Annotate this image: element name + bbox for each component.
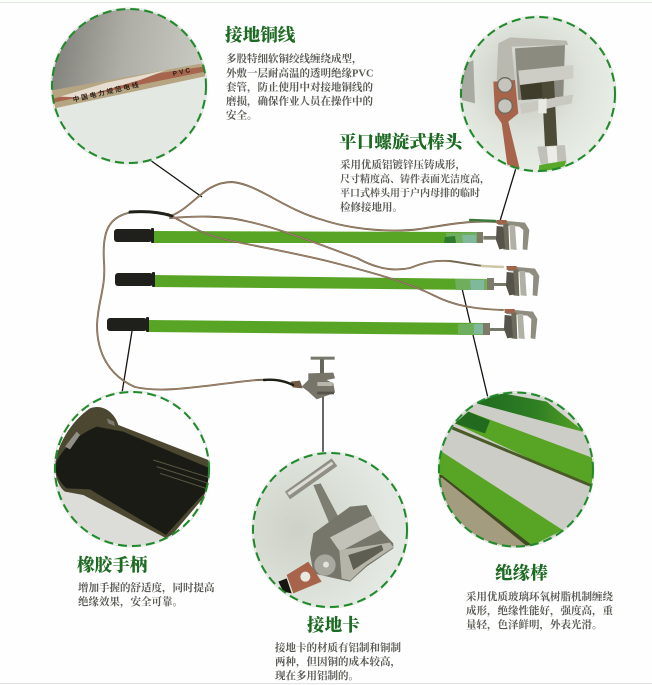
text block: flat screw clamp: 平口式棒头用于户内母排的临时 bbox=[340, 186, 480, 200]
text block: flat screw clamp: 检修接地用。 bbox=[340, 200, 403, 214]
leader lines bbox=[122, 160, 516, 452]
text block: flat screw clamp: 采用优质铝镀锌压铸成形， bbox=[340, 158, 466, 171]
rod 1 bbox=[114, 228, 483, 243]
panel: copper wire photo circle: PVC bbox=[172, 67, 193, 78]
heading: copper wire: 接地铜线 bbox=[225, 25, 296, 45]
text block: insulating rod: 成形，绝缘性能好，强度高，重 bbox=[466, 604, 613, 617]
text block: insulating rod: 量轻，色泽鲜明，外表光滑。 bbox=[466, 618, 602, 631]
text block: ground clamp: 现在多用铝制的。 bbox=[275, 669, 359, 682]
heading: rubber handle: 橡胶手柄 bbox=[77, 555, 148, 575]
text block: copper wire: 外敷一层耐高温的透明绝缘PVC bbox=[226, 66, 374, 80]
text block: copper wire bbox=[226, 52, 374, 122]
rod 2 bbox=[115, 272, 509, 290]
text block: copper wire: 安全。 bbox=[226, 108, 258, 122]
panel: flat screw clamp photo circle bbox=[460, 16, 616, 173]
clamp heads bbox=[291, 220, 539, 399]
clamp 3 bbox=[504, 309, 537, 339]
text block: flat screw clamp: 尺寸精度高、铸件表面光洁度高， bbox=[340, 172, 490, 186]
text block: copper wire: 磨损，确保作业人员在操作中的 bbox=[226, 94, 373, 108]
panel: copper wire photo circle: 中国电力规范电线 bbox=[72, 80, 141, 104]
ground clamp bbox=[291, 357, 335, 399]
panel: rubber handle photo circle bbox=[50, 390, 215, 550]
copper wires bbox=[97, 182, 503, 390]
heading: ground clamp: 接地卡 bbox=[307, 615, 360, 635]
text block: ground clamp: 两种，但因铜的成本较高， bbox=[275, 655, 401, 668]
rod 3 bbox=[107, 317, 506, 335]
text block: insulating rod bbox=[466, 590, 613, 631]
text block: rubber handle: 绝缘效果，安全可靠。 bbox=[78, 595, 183, 608]
heading: insulating rod: 绝缘棒 bbox=[495, 563, 548, 583]
panel: insulating rod photo circle bbox=[435, 390, 600, 553]
text block: ground clamp bbox=[275, 641, 401, 682]
clamp 2 bbox=[506, 266, 539, 296]
heading: flat screw clamp: 平口螺旋式棒头 bbox=[339, 132, 465, 152]
text block: copper wire: 套管，防止使用中对接地铜线的 bbox=[226, 80, 373, 94]
text block: rubber handle: 增加手握的舒适度，同时提高 bbox=[78, 581, 215, 594]
text block: flat screw clamp bbox=[340, 158, 490, 214]
clamp 1 bbox=[483, 220, 529, 250]
text block: ground clamp: 接地卡的材质有铝制和铜制 bbox=[275, 641, 401, 654]
text block: rubber handle bbox=[78, 581, 215, 608]
panel: ground clamp photo circle bbox=[250, 450, 410, 610]
panel: copper wire photo circle bbox=[50, 7, 210, 167]
text block: insulating rod: 采用优质玻璃环氧树脂机制缠绕 bbox=[466, 590, 613, 603]
text block: copper wire: 多股特细软铜绞线缠绕成型， bbox=[226, 52, 362, 65]
grounding rods bbox=[107, 228, 509, 335]
